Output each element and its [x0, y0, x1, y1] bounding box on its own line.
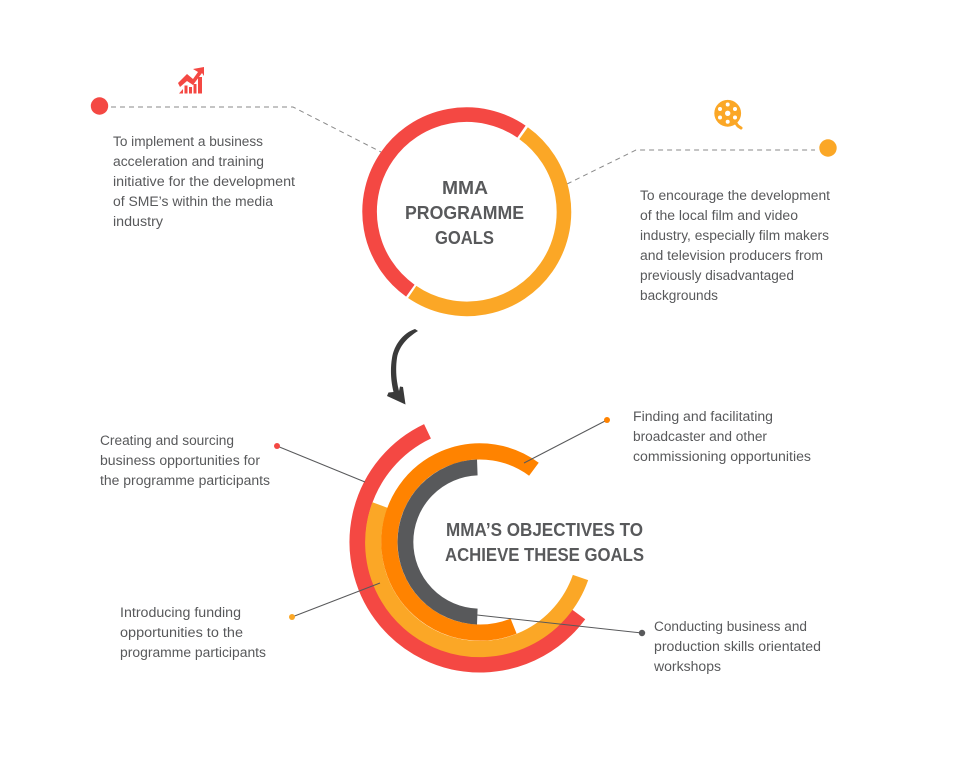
- text: second goal: To encourage the development: [640, 188, 830, 203]
- panel: programme goals: [91, 67, 837, 309]
- connector: dark orange leader: [524, 417, 610, 463]
- text: second goal: previously disadvantaged: [640, 268, 794, 283]
- heading: objectives: MMA’S OBJECTIVES TO: [446, 520, 643, 540]
- text: second goal: and television producers from: [640, 248, 823, 263]
- chart: concentric arcs: [357, 431, 580, 665]
- marker: red dot: [91, 97, 108, 115]
- text: workshops: [653, 619, 821, 674]
- heading: objectives: ACHIEVE THESE GOALS: [445, 545, 644, 565]
- heading: objectives: [445, 520, 644, 565]
- text: finding opportunities: Finding and facilitating: [633, 409, 773, 424]
- connector: grey leader: [477, 615, 645, 636]
- arrow: curved hand-drawn arrow: [387, 329, 418, 404]
- marker: orange dot: [819, 139, 837, 157]
- text: first goal: [113, 134, 295, 229]
- text: second goal: of the local film and video: [640, 208, 798, 223]
- connector: red dashed leader: [111, 107, 381, 152]
- text: finding opportunities: commissioning opportunities: [633, 449, 811, 464]
- text: first goal: initiative for the development: [113, 174, 295, 189]
- text: finding opportunities: [633, 409, 811, 464]
- text: second goal: backgrounds: [640, 288, 718, 303]
- text: creating opportunities: the programme participants: [100, 473, 270, 488]
- heading: MMA programme goals: MMA: [442, 178, 488, 198]
- ring: goals donut: [370, 115, 564, 309]
- heading: MMA programme goals: PROGRAMME: [405, 203, 524, 223]
- text: funding opportunities: Introducing funding: [120, 605, 241, 620]
- text: creating opportunities: Creating and sourcing: [100, 433, 234, 448]
- text: second goal: [640, 188, 830, 303]
- connector: orange dashed leader: [567, 150, 815, 184]
- text: finding opportunities: broadcaster and other: [633, 429, 768, 444]
- icon: growth chart: [178, 67, 204, 94]
- text: creating opportunities: [100, 433, 270, 488]
- text: workshops: Conducting business and: [654, 619, 807, 634]
- text: first goal: of SME’s within the media: [113, 194, 274, 209]
- text: funding opportunities: programme participants: [120, 645, 266, 660]
- text: funding opportunities: [120, 605, 266, 660]
- text: workshops: workshops: [653, 659, 721, 674]
- connector: red leader: [274, 443, 365, 482]
- text: creating opportunities: business opportunities for: [100, 453, 261, 468]
- text: first goal: industry: [113, 214, 163, 229]
- text: workshops: production skills orientated: [654, 639, 821, 654]
- text: first goal: acceleration and training: [113, 154, 264, 169]
- connector: light orange leader: [289, 583, 380, 620]
- heading: MMA programme goals: [405, 178, 524, 248]
- text: first goal: To implement a business: [113, 134, 263, 149]
- text: second goal: industry, especially film makers: [640, 228, 829, 243]
- text: funding opportunities: opportunities to the: [120, 625, 243, 640]
- heading: MMA programme goals: GOALS: [435, 228, 494, 248]
- panel: objectives: [100, 409, 821, 674]
- icon: film reel: [714, 100, 741, 128]
